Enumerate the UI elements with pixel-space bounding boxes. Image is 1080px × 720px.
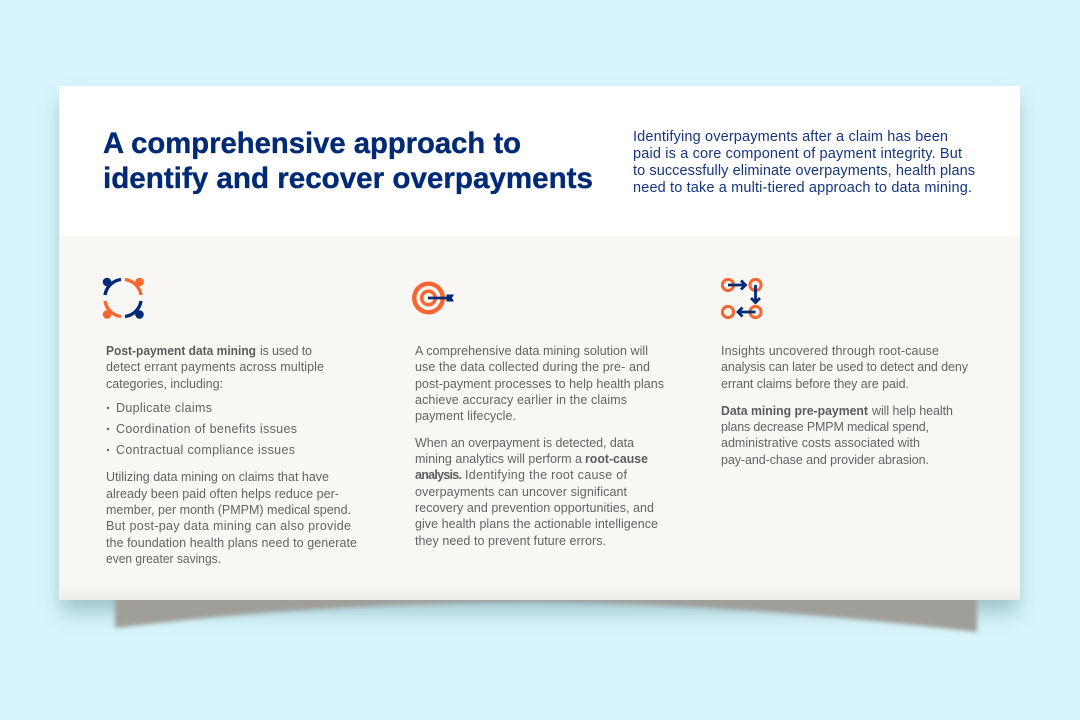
panel: details [59, 236, 1020, 600]
text column: pre-payment: errant claims before they are paid. [721, 377, 909, 391]
title: identify and recover overpayments [103, 162, 593, 195]
text column: post-payment: already been paid often helps reduce per- [106, 487, 339, 501]
text column: pre-payment: analysis can later be used to detect and deny [721, 360, 969, 374]
icon: target [414, 284, 454, 312]
text column: root-cause: mining analytics will perform a [415, 452, 582, 466]
bullet list: Coordination of benefits issues [116, 422, 297, 436]
card glow [61, 100, 1018, 612]
text column: root-cause: use the data collected during the pre- and [415, 360, 650, 374]
text column: pre-payment: pay-and-chase and provider abrasion. [721, 453, 929, 467]
text column: post-payment: detect errant payments across multiple [106, 360, 324, 374]
bullet list: Duplicate claims [116, 401, 212, 415]
text column: post-payment: is used to [260, 344, 312, 358]
text column: root-cause: analysis. [415, 468, 462, 482]
title: A comprehensive approach to [103, 127, 521, 160]
text column: post-payment: categories, including: [106, 377, 223, 391]
text column: root-cause: When an overpayment is detected, data [415, 436, 634, 450]
card drop shadow [115, 596, 977, 632]
text column: root-cause [415, 344, 664, 548]
text column: pre-payment [721, 344, 969, 467]
text column: pre-payment: plans decrease PMPM medical spend, [721, 420, 929, 434]
text column: root-cause: payment lifecycle. [415, 409, 516, 423]
text column: pre-payment: Insights uncovered through root-cause [721, 344, 939, 358]
text column: root-cause: Identifying the root cause of [465, 468, 628, 482]
text column: post-payment: But post-pay data mining can also provide [106, 519, 351, 533]
intro text: to successfully eliminate overpayments, health plans [633, 163, 975, 179]
intro text: need to take a multi-tiered approach to data mining. [633, 180, 972, 196]
intro text: paid is a core component of payment integrity. But [633, 146, 962, 162]
panel: header [59, 86, 1020, 236]
text column: root-cause: recovery and prevention opportunities, and [415, 501, 654, 515]
intro text [633, 129, 975, 196]
text column: post-payment: Post-payment data mining [106, 344, 256, 358]
title [103, 127, 593, 195]
text column: post-payment: member, per month (PMPM) medical spend. [106, 503, 351, 517]
intro text: Identifying overpayments after a claim has been [633, 129, 948, 145]
text column: post-payment: Utilizing data mining on claims that have [106, 470, 329, 484]
text column: root-cause: A comprehensive data mining solution will [415, 344, 648, 358]
bullet list: Contractual compliance issues [116, 443, 295, 457]
text column: root-cause: achieve accuracy earlier in the claims [415, 393, 627, 407]
icon: process arrows [722, 279, 761, 318]
text column: root-cause: give health plans the actionable intelligence [415, 517, 658, 531]
text column: pre-payment: administrative costs associated with [721, 436, 920, 450]
text column: post-payment: even greater savings. [106, 552, 221, 566]
text column: root-cause: post-payment processes to help health plans [415, 377, 664, 391]
text column: post-payment: the foundation health plans need to generate [106, 536, 357, 550]
text column: pre-payment: will help health [871, 404, 953, 418]
text column: root-cause: root-cause [585, 452, 648, 466]
text column: root-cause: overpayments can uncover significant [415, 485, 628, 499]
icon: circular nodes [103, 278, 144, 319]
text column: pre-payment: Data mining pre-payment [721, 404, 869, 418]
text column: post-payment [106, 344, 357, 566]
text column: root-cause: they need to prevent future errors. [415, 534, 606, 548]
bullet list [107, 401, 297, 457]
